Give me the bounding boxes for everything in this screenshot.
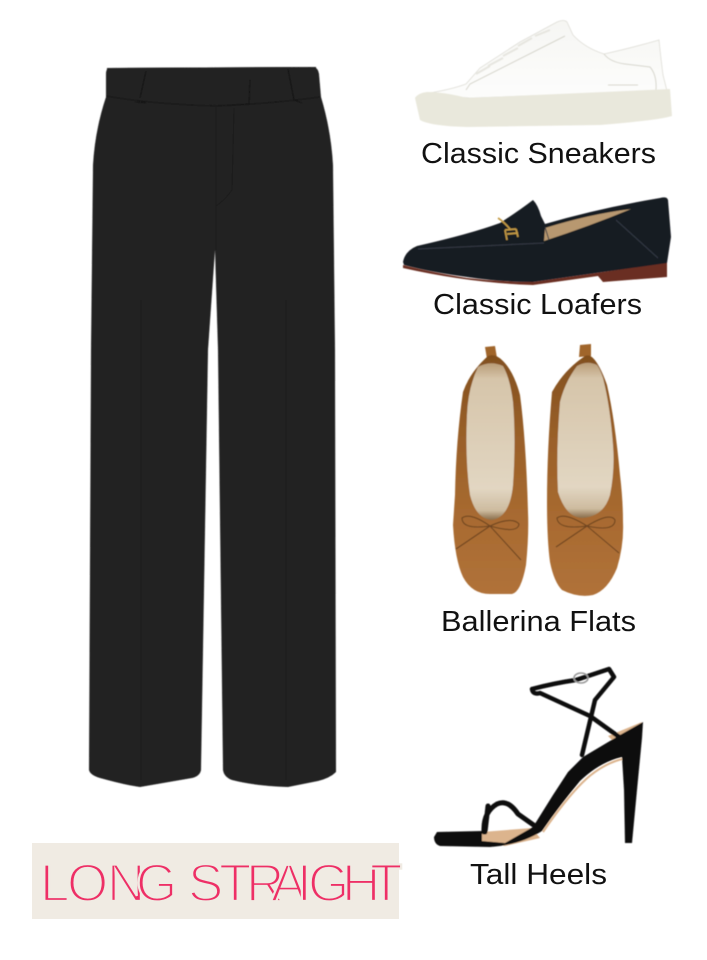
sneaker sole [415, 89, 672, 127]
loafer lining [544, 209, 631, 241]
belt tab [135, 69, 302, 106]
trousers [89, 67, 336, 787]
heel arch edge [543, 759, 622, 832]
fly seam [216, 106, 234, 250]
left flat bow [456, 516, 521, 560]
label: tall heels: Tall Heels [470, 859, 607, 891]
heel straps [484, 803, 535, 832]
title banner [32, 843, 402, 919]
right flat tab [579, 344, 591, 357]
right flat body [547, 355, 623, 596]
banner background [32, 843, 399, 919]
label: classic loafers: Classic Loafers [433, 289, 642, 321]
loafer [403, 197, 671, 285]
sneaker laces [476, 30, 550, 74]
trouser body [89, 67, 336, 787]
waistband [106, 67, 320, 105]
title text: LONG STRAIGHT [40, 854, 402, 913]
ankle straps [532, 669, 622, 755]
loafer highlight [418, 220, 658, 258]
ankle buckle [574, 673, 588, 683]
left flat [453, 346, 528, 594]
label: classic sneakers: Classic Sneakers [421, 138, 656, 170]
waistband seam [106, 96, 320, 106]
left flat insole [466, 363, 514, 520]
right flat insole [557, 363, 614, 518]
right flat bow [556, 516, 619, 553]
ballerina flats [453, 344, 623, 596]
right flat [547, 344, 623, 596]
sneaker [415, 20, 672, 127]
sneaker upper [423, 20, 667, 98]
heel sole and stiletto [434, 722, 643, 847]
left flat tab [485, 346, 497, 359]
sneaker details [466, 36, 656, 90]
loafer sole and heel [403, 262, 667, 285]
heel insole [482, 828, 540, 846]
loafer upper [403, 197, 671, 282]
left flat body [453, 355, 528, 594]
label: ballerina flats: Ballerina Flats [441, 606, 636, 638]
heel back lining [608, 722, 642, 740]
horsebit [498, 218, 518, 240]
pressed creases [141, 300, 286, 780]
tall heels [434, 669, 643, 847]
